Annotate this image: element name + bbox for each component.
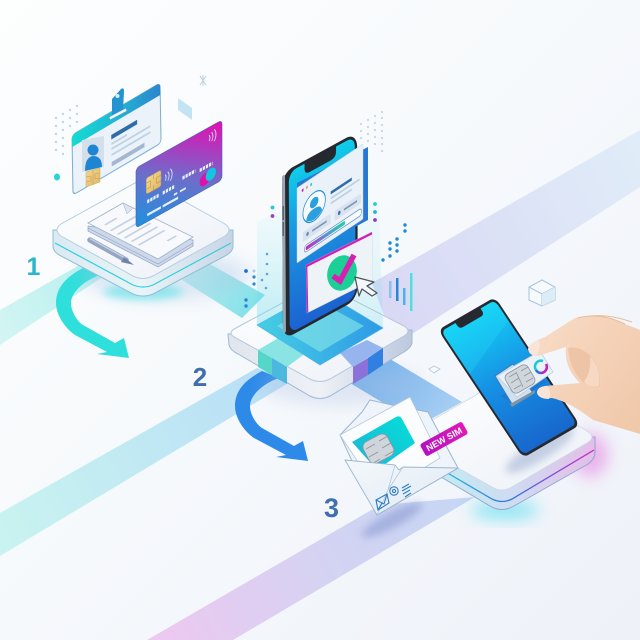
card logo [200,165,216,188]
window dots [302,182,312,192]
ID text lines [111,112,151,167]
phone 2 notch [305,145,336,175]
teal dot [54,174,60,180]
wireframe cube [529,280,555,306]
band: teal-blue lower left [0,368,290,556]
card chip [146,170,161,194]
ID card [72,83,161,195]
blue dots right [381,223,407,262]
card contactless marks [165,128,216,184]
knuckle lines [578,316,632,324]
palm shadow [568,348,600,387]
pen [90,238,134,265]
letter [340,397,440,495]
hand [528,316,640,434]
small diamond outline [429,366,440,373]
confirmation panel [306,232,377,313]
envelope shadow [358,497,426,543]
platform 1 [53,181,250,300]
step number 2: 2 [193,362,207,392]
step number 1: 1 [27,253,41,281]
fingernails [528,340,550,399]
paper stack [88,203,193,267]
envelope icons [376,484,411,510]
SIM on letter [352,416,415,470]
envelope with new SIM [340,397,458,543]
arrow 2 [235,371,308,461]
progress bar [304,208,362,253]
band: platform 2 to platform 3 [345,350,462,425]
band: platform 1 to platform 2 [182,263,265,318]
ID clip [109,88,127,120]
mini bar chart [389,273,412,311]
faint dots top right [360,111,383,152]
phone base plate [257,290,383,365]
NEW SIM badge [420,421,468,457]
NEW SIM badge: NEW SIM [424,425,464,453]
avatar [303,185,325,228]
SIM tray [495,364,546,407]
band: teal from left to platform 1 [0,262,110,345]
purple crossing on platform 2 [340,340,383,384]
envelope SIM chip [361,432,396,466]
SIM chip [503,363,537,395]
x mark [200,75,206,86]
profile form panel [297,144,368,263]
cursor [355,277,377,296]
ID photo [82,136,104,172]
teal crossing on platform 2 [258,337,310,384]
ID chip [86,168,100,187]
screen sheen [441,300,523,374]
SIM card [497,351,553,397]
data dots around phone 2 [244,111,407,308]
finger fold [584,356,599,387]
teal and magenta dots left [271,206,274,218]
blue dots left [244,253,268,308]
band: purple lower [147,497,475,640]
phone side buttons [282,206,284,236]
platform 3 [405,384,608,519]
decorative marks top left [54,75,206,180]
band: lavender upper right [372,130,640,345]
credit card [136,120,222,228]
SIM logo [535,361,547,373]
phone 2 [282,132,358,340]
envelope back [340,400,458,515]
card lines [147,187,186,216]
phone 3 notch [455,308,485,329]
light diamond [178,98,192,120]
green circle [323,251,361,295]
envelope front pocket [345,460,458,515]
form text lines [331,172,360,205]
teal and magenta dots right [373,202,377,222]
platform 2 [228,286,420,405]
arrow 1 [56,268,129,358]
form fields [303,193,361,242]
step number 3: 3 [324,493,339,523]
hologram glow panels [257,190,383,348]
phone 3 [438,297,580,480]
magenta check [333,255,354,281]
card numbers [147,161,213,202]
dot grid [55,105,78,155]
background paths [0,130,640,640]
